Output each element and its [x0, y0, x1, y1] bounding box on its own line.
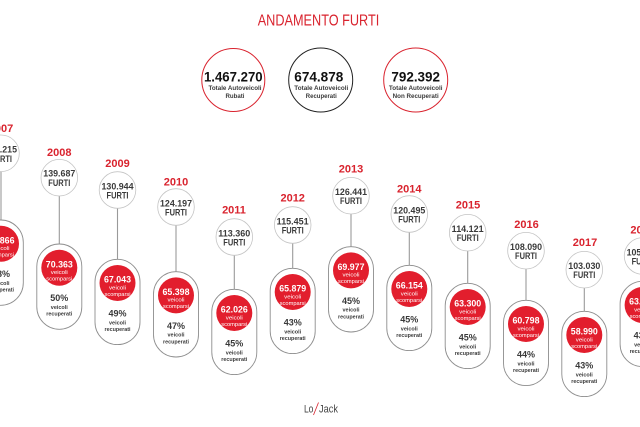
year column: 2014: 45%	[400, 314, 418, 324]
year column: 2010: 2010	[164, 176, 188, 188]
year column: 2011: scomparsi	[221, 322, 247, 328]
year column: 2008: 50%	[50, 293, 68, 303]
year column: 2008	[37, 147, 82, 329]
year column: 2015: 114.121	[452, 224, 484, 234]
year column: 2014: veicoli	[401, 291, 418, 297]
year column: 2015: veicoli	[459, 344, 477, 350]
year column: 2016: veicoli	[518, 361, 535, 367]
year column: 2010: scomparsi	[163, 304, 189, 310]
year column: 2013: 45%	[342, 296, 360, 306]
year column: 2016: veicoli	[518, 326, 534, 332]
year column: 2014: 66.154	[396, 281, 423, 291]
total recovered circle: Totale Autoveicoli	[294, 85, 349, 92]
year column: 2013: FURTI	[340, 196, 362, 206]
year column: 2009: 67.043	[104, 275, 131, 285]
year column: 2012: veicoli	[284, 294, 301, 300]
total recovered circle: Recuperati	[306, 93, 337, 100]
year column: 2017: FURTI	[573, 270, 595, 280]
year column: 2008: veicoli	[51, 270, 68, 276]
year column: 2013: 69.977	[338, 262, 364, 272]
year column: 2012	[270, 192, 315, 354]
year column: 2009: veicoli	[109, 285, 126, 291]
year column: 2016: scomparsi	[513, 333, 539, 339]
year column: 2013: recuperati	[338, 314, 364, 320]
year column: 2015: 45%	[459, 332, 477, 342]
total not recovered circle: Non Recuperati	[393, 93, 439, 100]
year column: 2015: 63.300	[454, 299, 481, 309]
year column: 2010: 47%	[167, 321, 185, 331]
year column: 2009: veicoli	[109, 320, 126, 326]
total recovered circle	[289, 48, 353, 112]
year column: 2012: 2012	[280, 192, 305, 204]
year column: 2016: 60.798	[512, 316, 540, 326]
year column: 2010: 124.197	[160, 198, 192, 208]
year column: 2012: 43%	[284, 318, 302, 328]
year column: 2016: 44%	[517, 350, 535, 360]
year column: 2012: 65.879	[279, 284, 306, 294]
year column: 2016: 108.090	[510, 242, 542, 252]
year column: 2015: 2015	[456, 200, 480, 212]
title: ANDAMENTO FURTI	[258, 13, 379, 30]
year column: 2008: scomparsi	[46, 276, 72, 282]
year column: 2012: scomparsi	[280, 301, 306, 307]
year column: 2011: 62.026	[221, 305, 248, 315]
year column: 2014: FURTI	[398, 214, 420, 224]
year column: 2014	[387, 183, 432, 351]
year column: 2010: recuperati	[163, 339, 189, 345]
year column: 2007	[0, 123, 23, 305]
total not recovered circle: Totale Autoveicoli	[389, 85, 443, 92]
year column: 2008: 139.687	[43, 169, 75, 179]
year column: 2017: 43%	[575, 360, 593, 370]
year column: 2015: veicoli	[459, 309, 476, 315]
year column: 2009: 2009	[105, 158, 130, 170]
year column: 2016	[504, 219, 548, 386]
year column: 2009: 49%	[108, 308, 127, 318]
year column: 2017: 58.990	[571, 327, 598, 337]
logo: LoJack: Jack	[319, 404, 338, 416]
year column: 2011: veicoli	[226, 315, 243, 321]
logo: LoJack	[304, 402, 338, 416]
year column: 2010: 65.398	[162, 287, 190, 297]
year column: 2009: FURTI	[106, 190, 128, 200]
year column: 2013: veicoli	[342, 308, 360, 314]
total not recovered circle	[384, 48, 448, 112]
year column: 2008: recuperati	[46, 312, 73, 318]
year column: 2014: 2014	[397, 183, 422, 195]
year column: 2011	[212, 205, 257, 375]
total stolen circle: Totale Autoveicoli	[208, 85, 262, 92]
year column: 2013: veicoli	[342, 273, 360, 279]
year column: 2013: 2013	[339, 164, 363, 176]
total stolen circle	[202, 48, 265, 112]
year column: 2011: 45%	[225, 338, 243, 348]
year column: 2015: recuperati	[455, 351, 481, 357]
year column: 2012: recuperati	[280, 336, 306, 342]
year column: 2011: 113.360	[218, 228, 250, 238]
year column: 2017: 2017	[573, 237, 597, 249]
year column: 2008: FURTI	[48, 178, 70, 188]
year column: 2011: FURTI	[223, 238, 245, 248]
total recovered circle: 674.878	[294, 70, 344, 85]
year column: 2011: veicoli	[226, 350, 243, 356]
year column: 2014: 120.495	[393, 206, 425, 216]
year column: 2008: veicoli	[51, 305, 68, 311]
year column: 2016: FURTI	[515, 251, 537, 261]
year column: 2010	[154, 176, 198, 357]
year column: 2012: FURTI	[282, 226, 304, 236]
year column: 2012: veicoli	[284, 329, 302, 335]
year column: 2017: scomparsi	[571, 344, 597, 350]
year column: 2014: scomparsi	[396, 298, 422, 304]
year column: 2011: 2011	[222, 205, 246, 217]
year column: 2010: veicoli	[168, 333, 185, 339]
year column: 2013: 126.441	[335, 187, 367, 197]
year column: 2015: FURTI	[457, 233, 479, 243]
year column: 2013	[328, 164, 374, 332]
total stolen circle: 1.467.270	[204, 70, 263, 85]
year column: 2008: 70.363	[46, 259, 73, 269]
year column: 2016: recuperati	[513, 368, 539, 374]
year column: 2010: veicoli	[168, 298, 184, 304]
year column: 2015	[445, 200, 490, 369]
year column: 2018	[620, 224, 640, 367]
total stolen circle: Rubati	[226, 93, 245, 100]
year column: 2017: veicoli	[576, 337, 593, 343]
logo: LoJack: Lo	[304, 404, 313, 416]
year column: 2012: 115.451	[277, 216, 309, 226]
year column: 2017: veicoli	[576, 372, 593, 378]
year column: 2009: 130.944	[102, 182, 134, 192]
year column: 2017: 103.030	[568, 261, 600, 271]
total not recovered circle: 792.392	[391, 70, 440, 85]
year column: 2010: FURTI	[165, 208, 187, 218]
year column: 2017	[562, 237, 607, 397]
year column: 2009: scomparsi	[104, 292, 130, 298]
year column: 2014: veicoli	[401, 326, 418, 332]
year column: 2011: recuperati	[221, 357, 248, 363]
year column: 2009: recuperati	[104, 327, 131, 333]
year column: 2017: recuperati	[571, 379, 598, 385]
year column: 2014: recuperati	[396, 333, 423, 339]
year column: 2008: 2008	[47, 147, 72, 159]
year column: 2015: scomparsi	[455, 316, 481, 322]
year column: 2013: scomparsi	[338, 279, 364, 285]
year column: 2016: 2016	[514, 219, 539, 231]
year column: 2009	[95, 158, 140, 345]
